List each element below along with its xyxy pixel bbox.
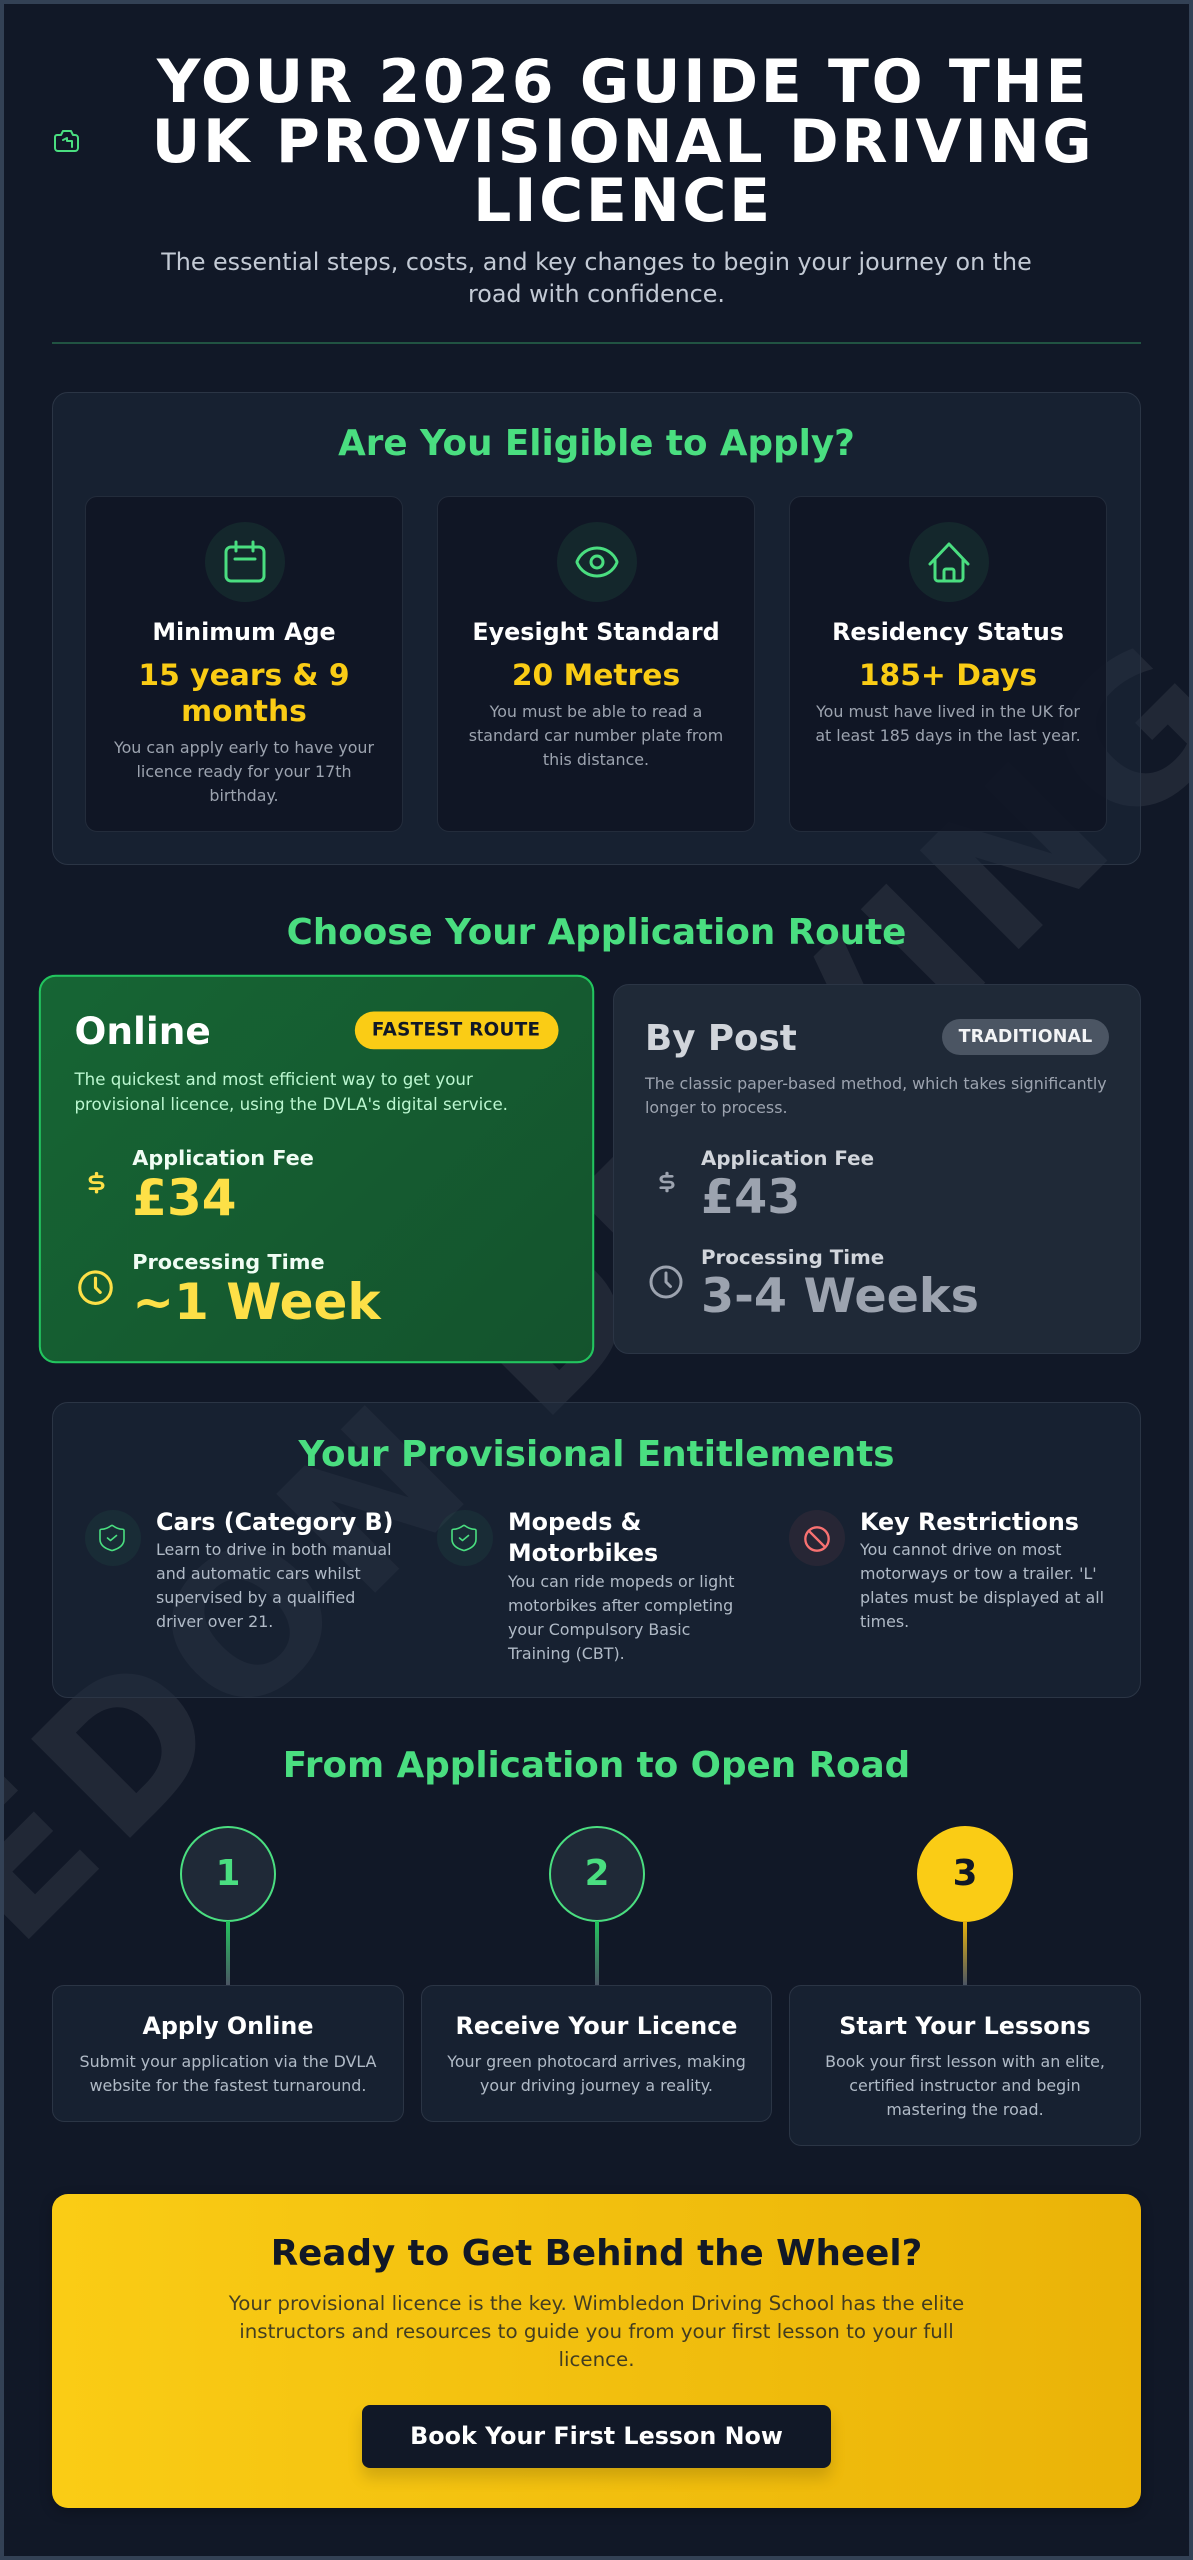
badge: fastest route: FASTEST ROUTE	[372, 1020, 540, 1041]
card heading: Eyesight Standard	[472, 618, 720, 646]
step heading: Apply Online	[142, 2012, 314, 2040]
cta text: licence.	[558, 2348, 635, 2371]
item text: supervised by a qualified	[156, 1588, 355, 1607]
subtitle	[161, 248, 1032, 308]
cta heading: Ready to Get Behind the Wheel?	[271, 2233, 922, 2274]
card description: You can apply early to have your	[114, 738, 374, 757]
title	[152, 47, 1094, 236]
icon: house	[909, 522, 989, 602]
title: UK PROVISIONAL DRIVING	[152, 106, 1094, 176]
item heading: Key Restrictions	[860, 1508, 1079, 1536]
time value: 3-4 Weeks	[701, 1269, 979, 1324]
badge: fastest route	[354, 1012, 558, 1049]
icon: clock	[78, 1270, 113, 1305]
route name: By Post	[645, 1018, 797, 1059]
header divider	[52, 342, 1141, 344]
subtitle: The essential steps, costs, and key changes to begin your journey on the	[161, 248, 1032, 276]
icon: ban	[789, 1510, 845, 1566]
step 3 card	[789, 1985, 1141, 2146]
item heading: Mopeds &	[508, 1508, 641, 1536]
time value: ~1 Week	[132, 1274, 381, 1332]
step text: Book your first lesson with an elite,	[825, 2052, 1105, 2071]
heading: eligibility: Are You Eligible to Apply?	[338, 423, 855, 464]
step text: Your green photocard arrives, making	[447, 2052, 746, 2071]
route description: longer to process.	[645, 1098, 788, 1117]
icon: shield check	[85, 1510, 141, 1566]
card value: months	[181, 694, 307, 729]
card value: 185+ Days	[859, 658, 1037, 693]
item text: motorbikes after completing	[508, 1596, 733, 1615]
item heading: Motorbikes	[508, 1539, 658, 1567]
item text: You can ride mopeds or light	[508, 1572, 734, 1591]
entitlement: cars	[85, 1508, 394, 1631]
item text: Learn to drive in both manual	[156, 1540, 391, 1559]
fee value: £43	[701, 1170, 800, 1225]
icon: eye	[557, 522, 637, 602]
item text: times.	[860, 1612, 909, 1631]
card value: 20 Metres	[512, 658, 680, 693]
icon: shield check	[437, 1510, 493, 1566]
time label: Processing Time	[132, 1250, 325, 1274]
cta text	[228, 2292, 964, 2371]
item text: plates must be displayed at all	[860, 1588, 1104, 1607]
item text	[860, 1540, 1104, 1631]
step text: certified instructor and begin	[849, 2076, 1081, 2095]
step 2 connector	[595, 1921, 599, 1985]
item text	[156, 1540, 391, 1631]
route description: The quickest and most efficient way to get your	[74, 1069, 473, 1089]
item text: Training (CBT).	[508, 1644, 625, 1663]
step 1 connector	[226, 1921, 230, 1985]
heading: timeline: From Application to Open Road	[283, 1745, 910, 1786]
card value: 15 years & 9	[138, 658, 350, 693]
card description	[815, 702, 1081, 745]
step text	[447, 2052, 746, 2095]
step heading: Start Your Lessons	[839, 2012, 1091, 2040]
step 3 number: 3	[953, 1853, 977, 1894]
step text: mastering the road.	[886, 2100, 1044, 2119]
card description	[114, 738, 374, 805]
card description: this distance.	[543, 750, 649, 769]
step 2 number	[549, 1826, 645, 1922]
fee label: Application Fee	[701, 1147, 874, 1170]
step text: Submit your application via the DVLA	[80, 2052, 376, 2071]
icon: dollar	[659, 1172, 675, 1192]
step 1 number: 1	[216, 1853, 240, 1894]
time label: Processing Time	[701, 1246, 884, 1269]
route description: provisional licence, using the DVLA's digital service.	[74, 1094, 508, 1114]
route description	[74, 1069, 508, 1114]
cta button: Book Your First Lesson Now	[410, 2422, 783, 2450]
card description: birthday.	[209, 786, 279, 805]
card description	[469, 702, 723, 769]
item text: your Compulsory Basic	[508, 1620, 690, 1639]
badge: traditional: TRADITIONAL	[959, 1027, 1092, 1047]
item text: You cannot drive on most	[860, 1540, 1062, 1559]
icon: clock	[650, 1266, 682, 1298]
panel: entitlements	[52, 1402, 1141, 1698]
card description: standard car number plate from	[469, 726, 723, 745]
heading: entitlements: Your Provisional Entitlements	[298, 1434, 895, 1475]
card heading: Residency Status	[832, 618, 1064, 646]
step 2 number: 2	[585, 1853, 609, 1894]
item heading: Cars (Category B)	[156, 1508, 394, 1536]
route name: Online	[74, 1010, 211, 1054]
item heading	[508, 1508, 658, 1567]
step 1 card	[52, 1985, 404, 2122]
step 1 number	[180, 1826, 276, 1922]
step heading: Receive Your Licence	[456, 2012, 737, 2040]
card: eyesight	[437, 496, 755, 832]
step text	[825, 2052, 1105, 2119]
badge: traditional	[942, 1019, 1109, 1055]
cta text: instructors and resources to guide you from your first lesson to your full	[239, 2320, 954, 2343]
subtitle: road with confidence.	[468, 280, 725, 308]
card: minimum age	[85, 496, 403, 832]
icon: dollar	[88, 1172, 104, 1194]
icon: header car badge	[54, 130, 79, 152]
step 3 connector	[963, 1921, 967, 1985]
fee value: £34	[132, 1170, 237, 1228]
card description: You must be able to read a	[490, 702, 702, 721]
fee label: Application Fee	[132, 1146, 314, 1170]
panel: by post route	[613, 984, 1141, 1354]
route description	[644, 1074, 1107, 1117]
heading: application route: Choose Your Application Route	[287, 912, 906, 953]
card value	[138, 658, 350, 729]
step text: website for the fastest turnaround.	[90, 2076, 366, 2095]
card heading: Minimum Age	[152, 618, 336, 646]
icon: calendar	[205, 522, 285, 602]
entitlement: restrictions	[789, 1508, 1104, 1631]
title: YOUR 2026 GUIDE TO THE	[157, 47, 1089, 117]
step 2 card	[421, 1985, 772, 2122]
card description: licence ready for your 17th	[136, 762, 352, 781]
step 3 number	[917, 1826, 1013, 1922]
card description: at least 185 days in the last year.	[815, 726, 1081, 745]
item text	[508, 1572, 734, 1663]
route description: The classic paper-based method, which takes significantly	[645, 1074, 1107, 1093]
cta text: Your provisional licence is the key. Wimbledon Driving School has the elite	[229, 2292, 964, 2315]
item text: motorways or tow a trailer. 'L'	[860, 1564, 1097, 1583]
item text: and automatic cars whilst	[156, 1564, 361, 1583]
card: residency	[789, 496, 1107, 832]
entitlement: mopeds	[437, 1508, 734, 1663]
cta button	[362, 2405, 831, 2468]
panel: online route	[39, 975, 594, 1363]
step text	[80, 2052, 376, 2095]
panel: eligibility	[52, 392, 1141, 865]
title: LICENCE	[473, 166, 773, 236]
call to action panel	[52, 2194, 1141, 2508]
card description: You must have lived in the UK for	[816, 702, 1080, 721]
item text: driver over 21.	[156, 1612, 273, 1631]
step text: your driving journey a reality.	[480, 2076, 713, 2095]
